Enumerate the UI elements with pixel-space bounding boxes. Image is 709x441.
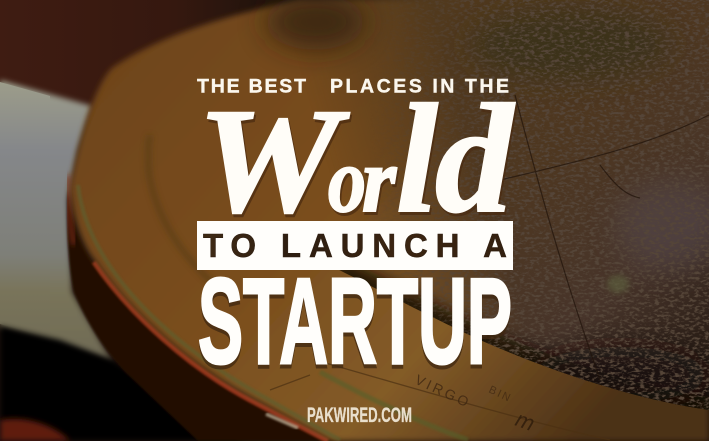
heading: World script lettering: d xyxy=(435,72,515,245)
background photo: pale paper panel xyxy=(0,80,112,362)
heading: World script lettering: o xyxy=(328,129,366,231)
heading: the best places in the: PLACES IN THE xyxy=(330,76,509,98)
heading: World script lettering: l xyxy=(396,72,439,245)
background lettering: VIRGO on the horizon ring: VIRGO xyxy=(413,371,474,411)
heading: World script lettering xyxy=(197,72,516,248)
heading: World script lettering: d xyxy=(436,75,516,248)
heading: the best places in the xyxy=(197,76,509,98)
background photo: antique globe xyxy=(256,0,709,410)
heading: World script lettering: r xyxy=(364,132,399,234)
banner: to launch a: TO LAUNCH A xyxy=(203,227,507,264)
heading: World script lettering: W xyxy=(198,81,352,247)
background photo: black foreground shadow xyxy=(0,326,245,441)
background photo: globe stand rim xyxy=(67,175,340,441)
heading: World script lettering: W xyxy=(197,78,350,244)
heading: the best places in the: THE BEST xyxy=(197,76,306,98)
background lettering: BIN on the horizon ring: BIN xyxy=(487,384,514,405)
heading: startup xyxy=(198,253,512,393)
website credit: PAKWIRED.COM xyxy=(307,404,412,427)
background lettering: zodiac glyph: m xyxy=(512,406,538,436)
heading: World script lettering: r xyxy=(362,129,397,231)
heading: World script lettering: l xyxy=(398,75,440,248)
heading: World script lettering: o xyxy=(330,132,368,234)
